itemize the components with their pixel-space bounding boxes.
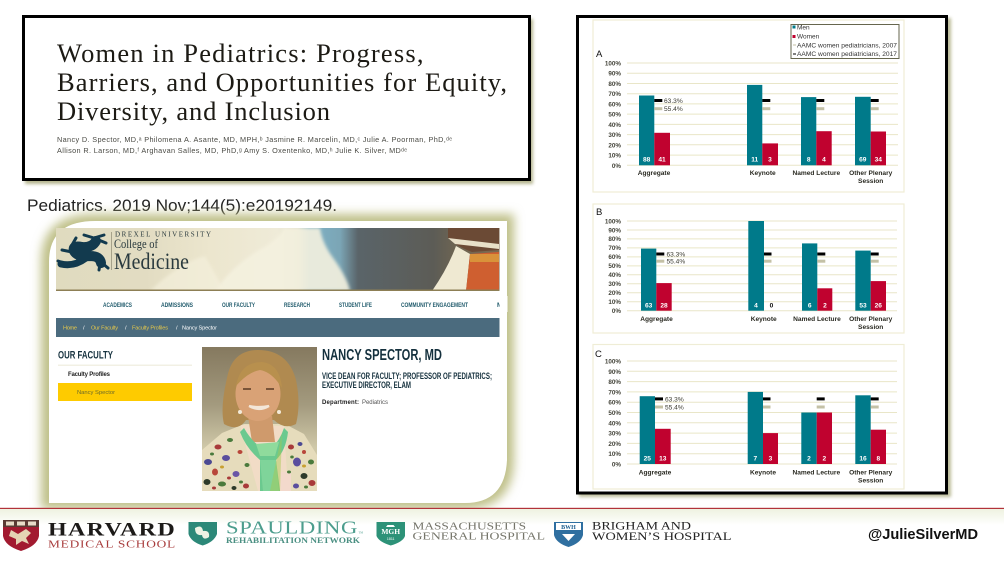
logo: Harvard Medical School: HARVARD <box>48 520 176 541</box>
chart C: C <box>595 349 602 360</box>
text: school name: DREXEL UNIVERSITY <box>115 230 211 238</box>
chart B: 0% <box>612 308 621 315</box>
text: school name: College of <box>114 237 159 251</box>
bars: keynote: 11 <box>751 156 759 164</box>
chart B: 100% <box>605 218 621 225</box>
breadcrumb bar: Home <box>63 326 77 332</box>
logo: Brigham and Women's Hospital: BWH <box>561 525 576 531</box>
panel: bar charts frame <box>578 16 951 497</box>
legend: AAMC women pediatricians, 2017 <box>797 51 897 58</box>
sidebar: our faculty: Nancy Spector <box>77 390 115 396</box>
bars: other plenary session: Other Plenary <box>849 470 893 476</box>
chart B: 10% <box>608 299 621 306</box>
photo: Nancy Spector portrait <box>202 347 317 491</box>
chart A: speakers, all <box>593 20 904 192</box>
chart A: speakers, all: 90% <box>608 71 621 78</box>
logo: Spaulding Rehabilitation Network: TM <box>358 530 363 534</box>
chart A: speakers, all: 70% <box>608 91 621 98</box>
text: Twitter handle: @JulieSilverMD <box>868 526 978 543</box>
bars: named lecture: 2 <box>822 456 826 462</box>
chart B: 30% <box>608 281 621 288</box>
navigation menu: M <box>497 302 502 309</box>
heading: article title <box>57 38 507 126</box>
chart C: 20% <box>608 441 621 448</box>
bars: aggregate: 63.3% <box>665 396 684 403</box>
legend: AAMC women pediatricians, 2007 <box>797 42 897 50</box>
chart B: 70% <box>608 245 621 252</box>
heading: article title: Women in Pediatrics: Progress, <box>57 38 424 68</box>
chart A: speakers, all: 10% <box>608 153 621 160</box>
navigation menu: STUDENT LIFE <box>339 302 373 309</box>
logo: Brigham and Women's Hospital: WOMEN’S HOSPITAL <box>592 531 732 543</box>
text block: journal citation: Pediatrics. 2019 Nov;144(5):e20192149. <box>27 196 337 215</box>
chart B: 50% <box>608 263 621 270</box>
bars: aggregate: 63.3% <box>666 252 685 258</box>
bars: other plenary session: Session <box>858 178 883 185</box>
bars: aggregate: 55.4% <box>665 404 684 412</box>
navigation menu: ACADEMICS <box>103 302 133 309</box>
logo: Massachusetts General Hospital: 1811 <box>387 537 395 541</box>
icon: Drexel dragon <box>58 235 108 270</box>
text: school name: Medicine <box>114 249 189 274</box>
logo: Spaulding Rehabilitation Network: REHABILITATION NETWORK <box>226 535 360 545</box>
bars: other plenary session: 53 <box>859 302 867 310</box>
chart A: speakers, all: 80% <box>608 81 621 88</box>
logo: Harvard Medical School <box>3 520 176 551</box>
bars: other plenary session: 26 <box>875 302 882 310</box>
legend: Women <box>797 34 820 40</box>
sidebar: our faculty <box>58 350 192 401</box>
logo: Harvard Medical School: MEDICAL SCHOOL <box>48 540 176 550</box>
text block: authors: Allison R. Larson, MD,ᶠ Arghavan Salles, MD, PhD,ᵍ Amy S. Oxentenko, MD,ʰ Julie K. Silver, MDᵈᵉ <box>57 146 407 155</box>
breadcrumb bar: / <box>83 326 85 332</box>
bars: other plenary session: Session <box>858 324 883 331</box>
bars: named lecture <box>792 397 840 476</box>
bars: aggregate: 63.3% <box>664 98 683 105</box>
bars: keynote: 4 <box>754 302 758 310</box>
bars: keynote: 0 <box>770 302 774 310</box>
chart C: 50% <box>608 410 621 417</box>
bars: named lecture <box>792 97 840 177</box>
panel: article title card <box>24 16 533 184</box>
bars: keynote <box>748 392 778 476</box>
logo: Massachusetts General Hospital: GENERAL HOSPITAL <box>412 530 545 542</box>
bars: named lecture: 6 <box>808 302 812 310</box>
bars: named lecture: Named Lecture <box>792 470 840 476</box>
bars: aggregate: 55.4% <box>664 106 683 113</box>
chart C: 90% <box>608 369 621 376</box>
navigation menu: RESEARCH <box>284 302 310 309</box>
legend <box>791 24 899 58</box>
bars: named lecture: Named Lecture <box>792 170 840 177</box>
bars: named lecture: 2 <box>823 302 827 310</box>
sidebar: our faculty: OUR FACULTY <box>58 350 113 362</box>
bars: other plenary session: Session <box>858 478 883 484</box>
logo: Massachusetts General Hospital <box>376 520 545 546</box>
navigation menu: OUR FACULTY <box>222 302 256 309</box>
bars: keynote <box>747 85 778 177</box>
chart B: 80% <box>608 236 621 243</box>
bars: named lecture: 4 <box>822 156 826 164</box>
chart C: 40% <box>608 420 621 427</box>
bars: keynote: 3 <box>769 456 773 462</box>
bars: other plenary session: 69 <box>859 156 867 164</box>
navigation menu <box>103 302 502 309</box>
breadcrumb bar: / <box>176 326 178 332</box>
bars: named lecture: 2 <box>807 456 811 462</box>
logo: Brigham and Women's Hospital: BRIGHAM AND <box>592 520 691 532</box>
bars: other plenary session: 34 <box>875 156 882 164</box>
chart C: 60% <box>608 400 621 407</box>
logo: Spaulding Rehabilitation Network: SPAULDING <box>226 518 358 538</box>
bars: other plenary session <box>849 97 893 185</box>
bars: aggregate: Aggregate <box>640 316 673 323</box>
profile: name and title: NANCY SPECTOR, MD <box>322 347 442 364</box>
text block: authors: Nancy D. Spector, MD,ᵃ Philomena A. Asante, MD, MPH,ᵇ Jasmine R. Marcelin, MD,ᶜ Julie A. Poorman, PhD,ᵈᵉ <box>57 135 452 144</box>
chart A: speakers, all: 0% <box>612 163 621 170</box>
bars: aggregate: 41 <box>658 156 666 164</box>
bars: keynote: 3 <box>768 156 772 164</box>
navigation menu: ADMISSIONS <box>161 302 194 309</box>
legend: Men <box>797 24 810 32</box>
chart C: 70% <box>608 389 621 396</box>
heading: article title: Diversity, and Inclusion <box>57 96 330 126</box>
bars: keynote: 7 <box>753 456 757 462</box>
breadcrumb bar: Our Faculty <box>91 326 118 332</box>
chart B: 90% <box>608 227 621 234</box>
chart A: speakers, all: 30% <box>608 132 621 139</box>
bars: keynote: Keynote <box>751 316 777 323</box>
breadcrumb bar: Nancy Spector <box>182 326 217 332</box>
bars: other plenary session: 8 <box>876 456 880 462</box>
bars: aggregate: 63 <box>645 302 653 310</box>
bars: named lecture <box>793 243 841 323</box>
panel: faculty web page screenshot <box>41 214 514 509</box>
bars: aggregate <box>639 396 684 476</box>
chart A: speakers, all: 20% <box>608 142 621 149</box>
chart A: speakers, all: 60% <box>608 101 621 108</box>
footer band <box>0 508 1004 551</box>
bars: aggregate: Aggregate <box>638 170 671 177</box>
chart C: 100% <box>605 358 621 366</box>
chart A: speakers, all: A <box>596 49 603 60</box>
chart C <box>593 344 904 489</box>
breadcrumb bar: / <box>125 326 127 332</box>
bars: aggregate: 13 <box>659 456 667 462</box>
profile: name and title: EXECUTIVE DIRECTOR, ELAM <box>322 380 411 390</box>
profile: name and title <box>322 347 492 406</box>
chart C: 10% <box>608 451 621 458</box>
text block: authors <box>57 135 452 155</box>
sidebar: our faculty: Faculty Profiles <box>68 372 111 378</box>
profile: name and title: VICE DEAN FOR FACULTY; PROFESSOR OF PEDIATRICS; <box>322 371 492 381</box>
bars: other plenary session: Other Plenary <box>849 316 893 323</box>
bars: other plenary session: 16 <box>859 456 867 462</box>
bars: aggregate: 28 <box>660 302 668 310</box>
chart C: 80% <box>608 379 621 386</box>
bars: aggregate: 55.4% <box>666 259 685 266</box>
logo: Massachusetts General Hospital: MGH <box>381 527 400 536</box>
chart B <box>593 204 904 333</box>
bars: other plenary session <box>849 251 893 331</box>
chart A: speakers, all: 50% <box>608 112 621 119</box>
profile: name and title: Department: <box>322 400 359 406</box>
bars: keynote: Keynote <box>750 470 776 476</box>
bars: keynote: Keynote <box>750 170 776 177</box>
bars: named lecture: 8 <box>807 156 811 164</box>
bars: aggregate: 25 <box>644 456 651 462</box>
bars: other plenary session <box>849 395 893 484</box>
chart A: speakers, all: 40% <box>608 122 621 129</box>
pattern: floral blazer <box>204 438 316 490</box>
banner: Drexel College of Medicine <box>56 228 500 291</box>
text: school name <box>114 232 211 269</box>
logo: Spaulding Rehabilitation Network <box>188 518 363 546</box>
navigation menu: COMMUNITY ENGAGEMENT <box>401 302 468 309</box>
chart B: 40% <box>608 272 621 279</box>
chart B: 20% <box>608 290 621 297</box>
breadcrumb bar: Faculty Profiles <box>132 326 168 332</box>
chart C: 0% <box>612 462 621 468</box>
chart B: 60% <box>608 254 621 261</box>
bars: other plenary session: Other Plenary <box>849 170 893 177</box>
heading: article title: Barriers, and Opportunities for Equity, <box>57 67 507 97</box>
bars: aggregate <box>638 96 683 177</box>
bars: keynote <box>748 221 777 323</box>
logo: Brigham and Women's Hospital <box>554 520 732 547</box>
breadcrumb bar <box>56 318 500 337</box>
bars: aggregate: 88 <box>643 156 651 164</box>
bars: aggregate: Aggregate <box>639 470 672 476</box>
logo: Massachusetts General Hospital: MASSACHUSETTS <box>412 520 526 532</box>
profile: name and title: Pediatrics <box>362 400 388 406</box>
chart A: speakers, all: 100% <box>605 60 621 68</box>
bars: named lecture: Named Lecture <box>793 316 841 323</box>
chart B: B <box>596 207 602 218</box>
chart C: 30% <box>608 431 621 438</box>
bars: aggregate <box>640 249 685 323</box>
